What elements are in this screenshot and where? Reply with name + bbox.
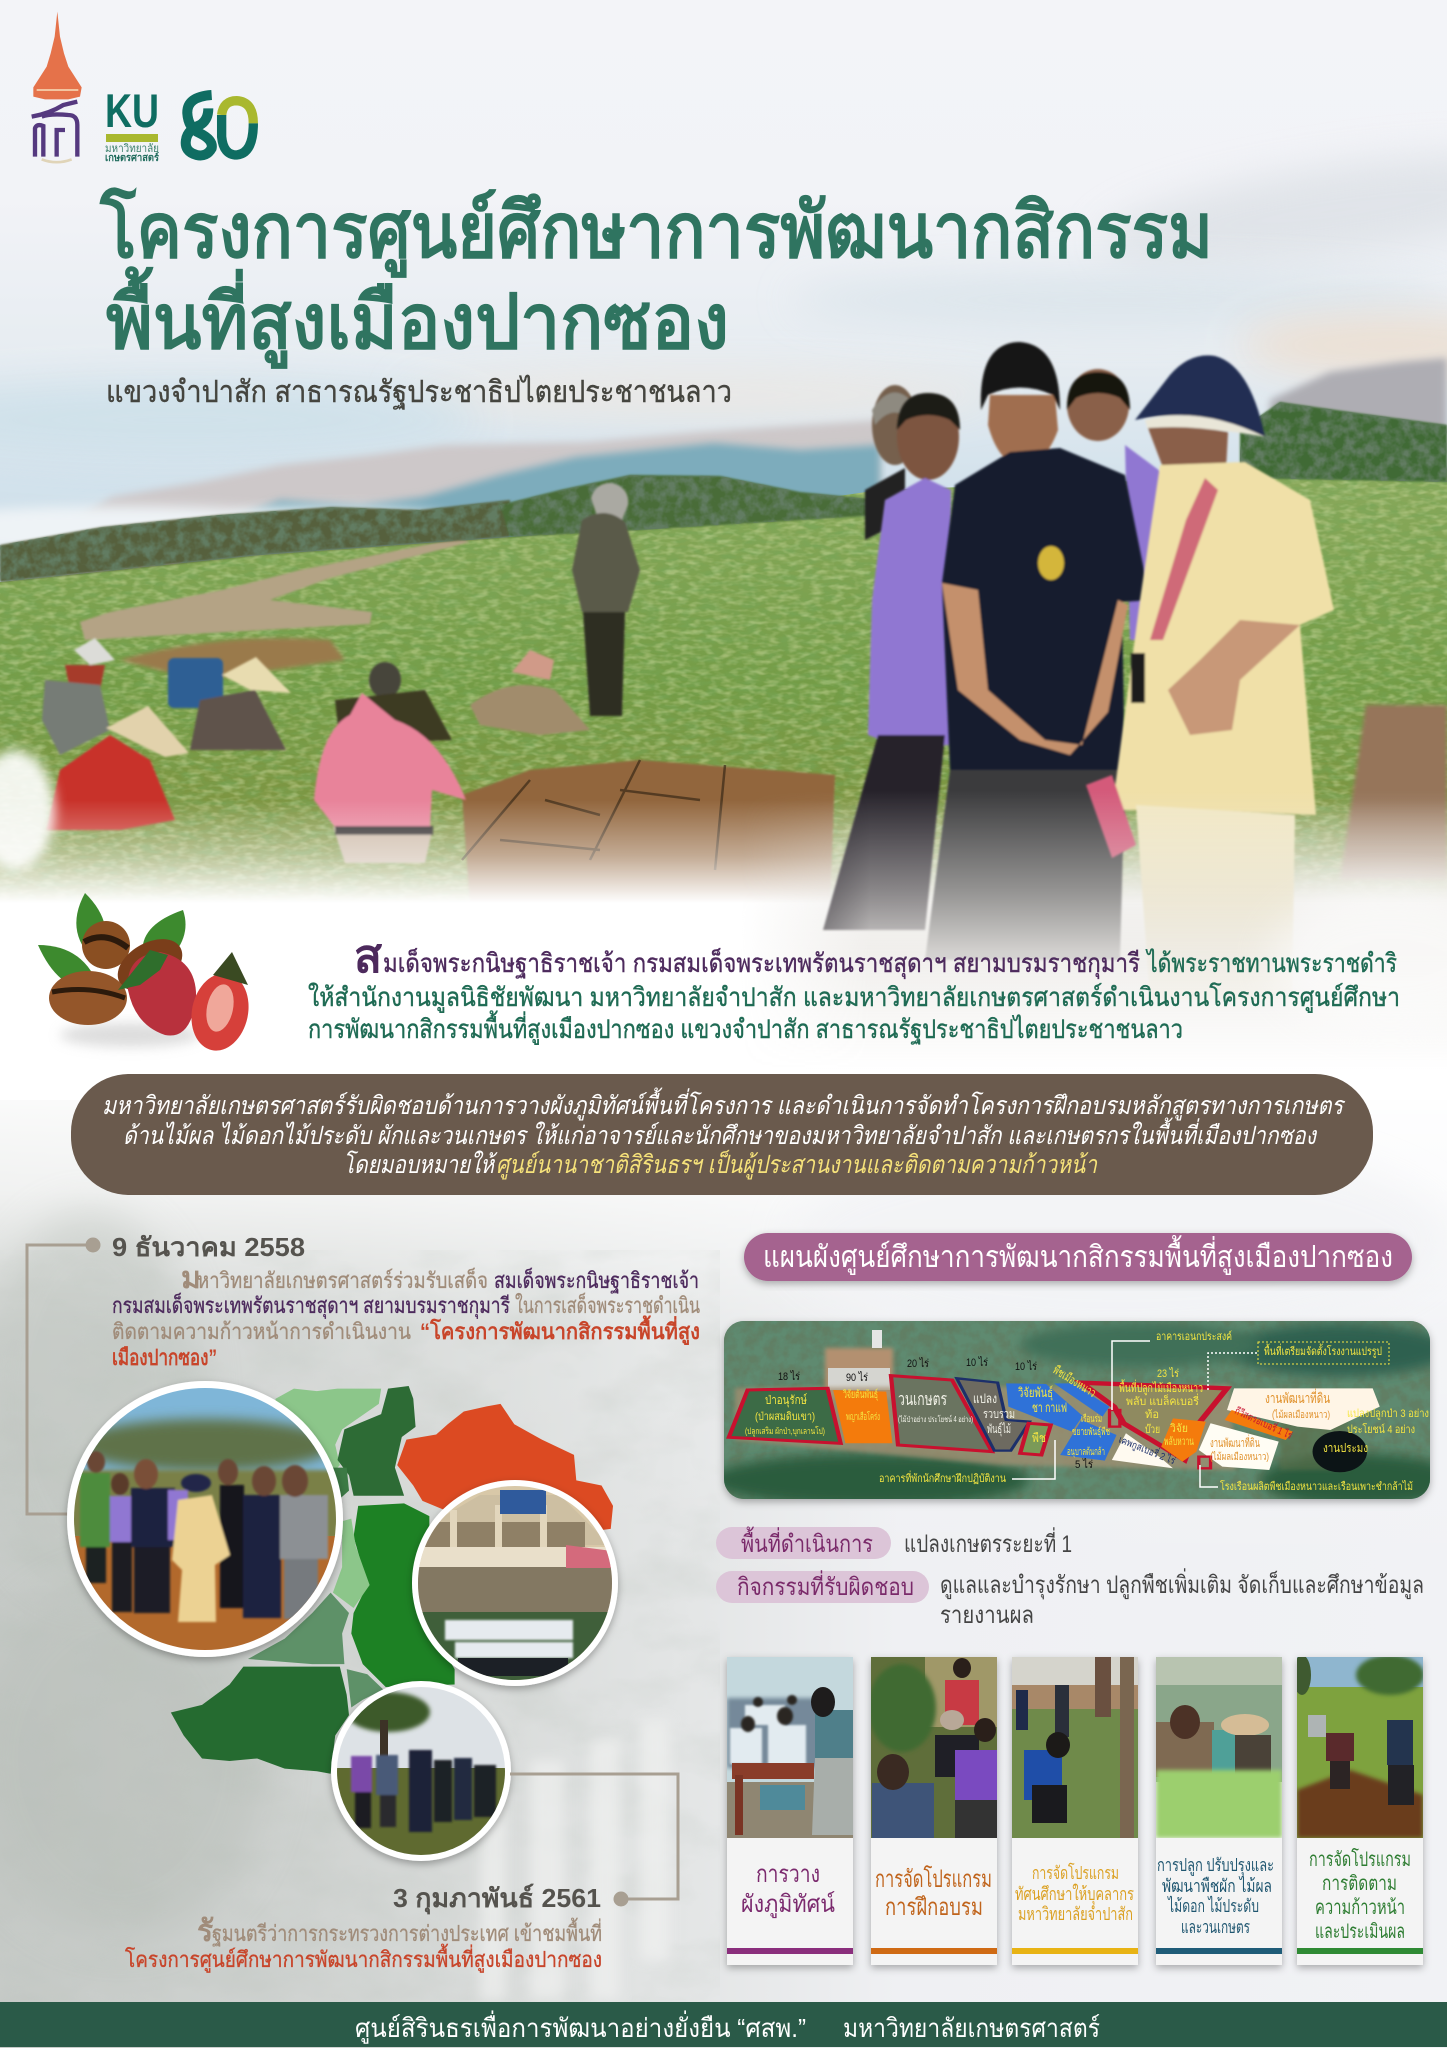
aerial labels: อาคารที่พักนักศึกษาฝึกปฏิบัติงาน	[879, 1470, 1006, 1485]
intro paragraph: ได้พระราชทานพระราชดำริ	[1145, 948, 1397, 978]
footer bar	[0, 2002, 1447, 2047]
mist over figures	[779, 798, 1447, 1024]
photo circle: royal visit group	[67, 1381, 343, 1657]
text: training: การฝึกอบรม	[885, 1894, 983, 1921]
aerial labels: (ไม้ผลเมืองหนาว)	[1210, 1451, 1269, 1463]
aerial labels: วิจัยพันธุ์	[1017, 1385, 1053, 1401]
card: monitoring and evaluation	[1293, 1655, 1424, 1965]
field	[0, 470, 1447, 905]
text: training: การจัดโปรแกรม	[875, 1865, 992, 1893]
photo circle: minister field visit	[331, 1681, 511, 1861]
aerial labels: แปลง	[973, 1391, 997, 1406]
text: planting: การปลูก ปรับปรุงและ	[1157, 1855, 1274, 1876]
text: minister visit: โครงการศูนย์ศึกษาการพัฒนากสิกรรมพื้นที่สูงเมืองปากซอง	[125, 1944, 602, 1973]
aerial labels: วิจัยต้นพันธุ์	[842, 1388, 878, 1401]
aerial labels: ชา กาแฟ	[1032, 1400, 1067, 1415]
sky and clouds	[0, 0, 1447, 600]
footer bar: ศูนย์สิรินธรเพื่อการพัฒนาอย่างยั่งยืน “ศสพ.”	[355, 2010, 806, 2044]
man in navy shirt	[925, 342, 1150, 960]
old man	[865, 385, 918, 540]
label: responsibilities	[716, 1568, 1424, 1629]
aerial labels: 10 ไร่	[1015, 1360, 1037, 1373]
date: 9 December 2558: 9 ธันวาคม 2558	[112, 1232, 305, 1262]
aerial labels: 90 ไร่	[846, 1371, 868, 1384]
text: planting: พัฒนาพืชผัก ไม้ผล	[1162, 1875, 1272, 1896]
title: โครงการศูนย์ศึกษาการพัฒนากสิกรรม	[99, 186, 1213, 278]
map of Champasak province	[171, 1386, 613, 1774]
mountains	[0, 358, 1447, 570]
photo: student writing in field	[1012, 1657, 1138, 1838]
aerial labels: ขยายพันธุ์พืช	[1072, 1426, 1110, 1438]
text: monitoring	[1309, 1848, 1411, 1943]
text: tours: ทัศนศึกษาให้บุคลากร	[1015, 1883, 1134, 1905]
aerial labels: พืชเมืองหนาว	[1050, 1363, 1099, 1400]
soil beds	[462, 705, 1447, 905]
aerial site plan map	[710, 1321, 1447, 1506]
subtitle: แขวงจำปาสัก สาธารณรัฐประชาธิปไตยประชาชนลาว	[106, 374, 732, 410]
text: planning: การวาง	[756, 1861, 820, 1888]
aerial labels: (ไม้ผลเมืองหนาว)	[1272, 1409, 1330, 1421]
photo: field training	[868, 1657, 997, 1838]
logo: KU: เกษตรศาสตร์	[105, 152, 160, 164]
text: monitoring: ความก้าวหน้า	[1315, 1897, 1405, 1919]
aerial labels: 18 ไร่	[778, 1370, 800, 1383]
man in purple shirt	[823, 393, 960, 930]
label: responsibilities: รายงานผล	[940, 1602, 1034, 1629]
woman in cream suit	[1086, 355, 1334, 1000]
text: tours: มหาวิทยาลัยจำปาสัก	[1018, 1904, 1133, 1924]
logo: 80 years	[186, 95, 253, 155]
aerial labels: ท้อ	[1145, 1409, 1159, 1421]
aerial labels: งานพัฒนาที่ดิน	[1265, 1389, 1330, 1406]
title	[99, 186, 1213, 369]
text: royal visit: กรมสมเด็จพระเทพรัตนราชสุดาฯ สยามบรมราชกุมารี	[112, 1291, 510, 1319]
aerial arrows	[1012, 1341, 1389, 1487]
card: landscape planning	[727, 1657, 853, 1965]
aerial labels	[745, 1330, 1429, 1493]
workers in the field	[42, 483, 640, 863]
logo: KU: มหาวิทยาลัย	[105, 143, 159, 155]
crouching workers	[42, 638, 590, 863]
aerial labels: บ๊วย	[1145, 1423, 1160, 1436]
standing worker	[572, 483, 640, 716]
card: study tours	[1012, 1657, 1138, 1965]
aerial labels: (ปลูกเสริม ผักป่า,บุกเลานโป)	[745, 1426, 825, 1437]
logo: KU	[105, 84, 160, 164]
text: planting: ไม้ดอก ไม้ประดับ	[1167, 1895, 1259, 1916]
aerial labels: ประโยชน์ 4 อย่าง	[1347, 1422, 1415, 1436]
text: royal visit: หาวิทยาลัยเกษตรศาสตร์ร่วมรับเสด็จ	[197, 1266, 488, 1293]
text: minister visit: รั	[197, 1915, 214, 1948]
text: training	[875, 1865, 992, 1921]
intro paragraph: ส	[354, 930, 383, 982]
aerial labels: พืช	[1032, 1431, 1046, 1445]
label: responsibilities: กิจกรรมที่รับผิดชอบ	[737, 1570, 914, 1601]
logo: royal spire monogram	[32, 12, 82, 162]
aerial labels: 10 ไร่	[966, 1356, 988, 1369]
aerial labels: อนุบาลต้นกล้า	[1067, 1446, 1105, 1458]
officials group	[823, 342, 1334, 1000]
photo: workers digging	[1293, 1655, 1424, 1838]
text: royal visit: ในการเสด็จพระราชดำเนิน	[515, 1291, 700, 1318]
tree lines	[0, 402, 1447, 582]
icon: coffee beans and strawberries	[38, 893, 255, 1056]
intro paragraph: มเด็จพระกนิษฐาธิราชเจ้า กรมสมเด็จพระเทพรัตนราชสุดาฯ สยามบรมราชกุมารี	[383, 947, 1140, 979]
aerial labels: งานพัฒนาที่ดิน	[1210, 1434, 1260, 1450]
photo: greenhouse lettuce	[1156, 1657, 1282, 1838]
text: royal visit: ติดตามความก้าวหน้าการดำเนินงาน	[112, 1319, 411, 1344]
aerial labels: 23 ไร่	[1157, 1367, 1179, 1380]
aerial labels: พื้นที่เตรียมจัดตั้งโรงงานแปรรูป	[1264, 1343, 1382, 1358]
title: พื้นที่สูงเมืองปากซอง	[106, 266, 729, 369]
text: royal visit: เมืองปากซอง”	[112, 1345, 217, 1370]
field mist	[0, 750, 1447, 912]
text: minister visit	[125, 1915, 602, 1973]
text: monitoring: การติดตาม	[1322, 1873, 1397, 1895]
text: monitoring: และประเมินผล	[1315, 1921, 1405, 1943]
aerial plots	[729, 1376, 1380, 1472]
callout: university responsibility	[71, 1074, 1373, 1195]
intro paragraph	[308, 930, 1400, 1045]
heading: site plan	[744, 1233, 1412, 1281]
text: tours	[1015, 1862, 1134, 1924]
aerial labels: พลับหวาน	[1164, 1436, 1194, 1448]
aerial labels: อาคารเอนกประสงค์	[1156, 1330, 1232, 1343]
text: monitoring: การจัดโปรแกรม	[1309, 1848, 1411, 1871]
timeline connector: February 2018	[510, 1774, 678, 1906]
aerial labels: รวบรวม	[983, 1407, 1015, 1421]
aerial labels: แปลงปลูกป่า 3 อย่าง	[1347, 1408, 1429, 1420]
aerial labels: 20 ไร่	[907, 1357, 929, 1370]
aerial labels: กีวีสตรอเบอรี่ 1 ไร่	[1233, 1403, 1295, 1442]
callout: university responsibility: ศูนย์นานาชาติสิรินธรฯ เป็นผู้ประสานงานและติดตามความก้าวหน้า	[496, 1149, 1098, 1180]
aerial labels: (ไม้ป่าอย่าง ประโยชน์ 4 อย่าง)	[898, 1414, 973, 1424]
aerial labels: (ป่าผสมดิบเขา)	[755, 1411, 815, 1423]
card: planting improvement	[1156, 1657, 1282, 1965]
aerial labels: พญาเสือโคร่ง	[846, 1410, 880, 1423]
text: tours: การจัดโปรแกรม	[1032, 1862, 1119, 1883]
aerial labels: เคพกูสเบอรี่ 2 ไร่	[1117, 1432, 1178, 1467]
date: 3 February 2561: 3 กุมภาพันธ์ 2561	[393, 1883, 601, 1915]
aerial terrain	[710, 1321, 1447, 1506]
text: royal visit	[112, 1262, 700, 1370]
label: operating area	[716, 1526, 1072, 1559]
aerial labels: พันธุ์ไม้	[987, 1422, 1011, 1437]
card: training programme	[868, 1657, 997, 1965]
text: planting	[1157, 1855, 1274, 1937]
text: royal visit: ม	[181, 1262, 201, 1295]
aerial labels: งานประมง	[1323, 1441, 1368, 1455]
aerial labels: พลับ แบล็คเบอรี่	[1126, 1393, 1199, 1408]
label: operating area: พื้นที่ดำเนินการ	[741, 1526, 873, 1558]
purple man behind	[1067, 369, 1172, 640]
aerial labels: 5 ไร่	[1075, 1458, 1093, 1471]
photo: classroom	[727, 1657, 853, 1838]
aerial labels: พื้นที่ปลูกไม้เมืองหนาว	[1119, 1379, 1203, 1396]
footer bar: มหาวิทยาลัยเกษตรศาสตร์	[843, 2013, 1100, 2043]
timeline connector: December 2015	[27, 1238, 100, 1514]
intro paragraph: การพัฒนากสิกรรมพื้นที่สูงเมืองปากซอง แขวงจำปาสัก สาธารณรัฐประชาธิปไตยประชาชนลาว	[308, 1010, 1183, 1045]
photo circle: school building and students	[412, 1480, 620, 1686]
hero landscape photo	[0, 0, 1447, 1070]
text: royal visit: สมเด็จพระกนิษฐาธิราชเจ้า	[494, 1266, 699, 1294]
label: operating area: แปลงเกษตรระยะที่ 1	[904, 1527, 1072, 1558]
text: royal visit: “โครงการพัฒนากสิกรรมพื้นที่สูง	[420, 1315, 700, 1346]
logo: KU: KU	[105, 84, 159, 137]
aerial labels: เรือนร่ม	[1081, 1413, 1102, 1425]
aerial labels: ป่าอนุรักษ์	[765, 1393, 807, 1408]
text: planning: ผังภูมิทัศน์	[741, 1890, 835, 1919]
aerial labels: วนเกษตร	[898, 1389, 947, 1409]
callout: university responsibility: โดยมอบหมายให้	[343, 1150, 498, 1179]
text: planning	[741, 1861, 835, 1919]
aerial labels: วิจัย	[1169, 1423, 1188, 1435]
text: planting: และวนเกษตร	[1181, 1917, 1250, 1937]
text: minister visit: ฐมนตรีว่าการกระทรวงการต่างประเทศ เข้าชมพื้นที่	[212, 1918, 602, 1947]
logos	[32, 12, 253, 164]
